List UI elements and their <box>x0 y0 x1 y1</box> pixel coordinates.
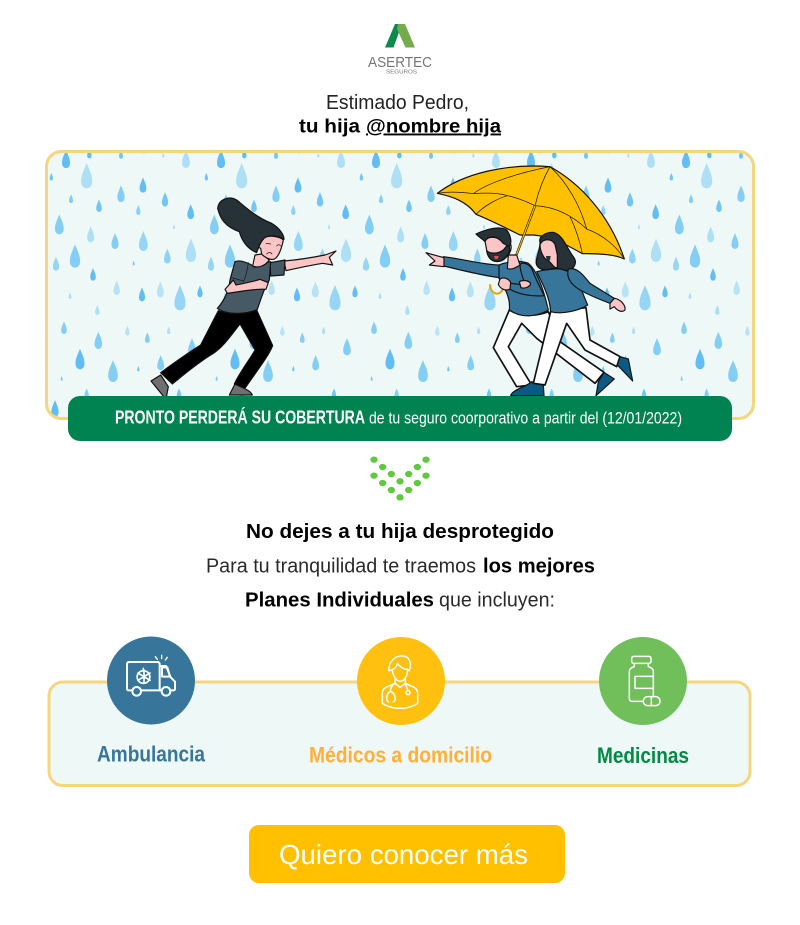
panel: rain illustration <box>45 148 800 420</box>
button: call to action: Quiero conocer más <box>279 839 528 870</box>
text block: message: Planes Individuales <box>245 590 434 612</box>
button: call to action <box>249 825 565 883</box>
illustration: running woman <box>151 198 336 399</box>
rain drops <box>50 148 800 417</box>
panel: benefits <box>49 636 750 786</box>
greeting text <box>299 92 501 138</box>
icon: doctor <box>357 637 445 725</box>
illustration: couple under umbrella <box>426 166 633 396</box>
logo: Asertec Seguros: SEGUROS <box>386 70 417 76</box>
text block: message <box>206 521 595 612</box>
text block: message: No dejes a tu hija desprotegido <box>246 521 554 543</box>
icon: dotted down arrow <box>370 456 430 500</box>
text block: message: los mejores <box>483 556 595 578</box>
banner: coverage notice: PRONTO PERDERÁ SU COBERTURA <box>115 406 365 428</box>
man <box>426 228 614 396</box>
label: Médicos a domicilio: Médicos a domicilio <box>309 742 492 768</box>
logo: Asertec Seguros <box>368 24 432 76</box>
icon: medicine bottle <box>599 637 687 725</box>
logo: Asertec Seguros: ASERTEC <box>368 55 432 71</box>
banner: coverage notice <box>68 396 732 441</box>
umbrella <box>437 166 624 294</box>
label: Medicinas: Medicinas <box>597 743 689 768</box>
greeting text: tu hija <box>299 116 360 138</box>
greeting text: Estimado Pedro, <box>326 92 469 114</box>
text block: message: Para tu tranquilidad te traemos <box>206 556 476 578</box>
label: Ambulancia: Ambulancia <box>97 742 206 766</box>
woman <box>519 232 633 385</box>
banner: coverage notice: de tu seguro coorporativo a partir del (12/01/2022) <box>369 408 682 428</box>
text block: message: que incluyen: <box>439 590 555 612</box>
icon: ambulance <box>107 636 195 724</box>
greeting text: @nombre hija <box>366 116 501 138</box>
